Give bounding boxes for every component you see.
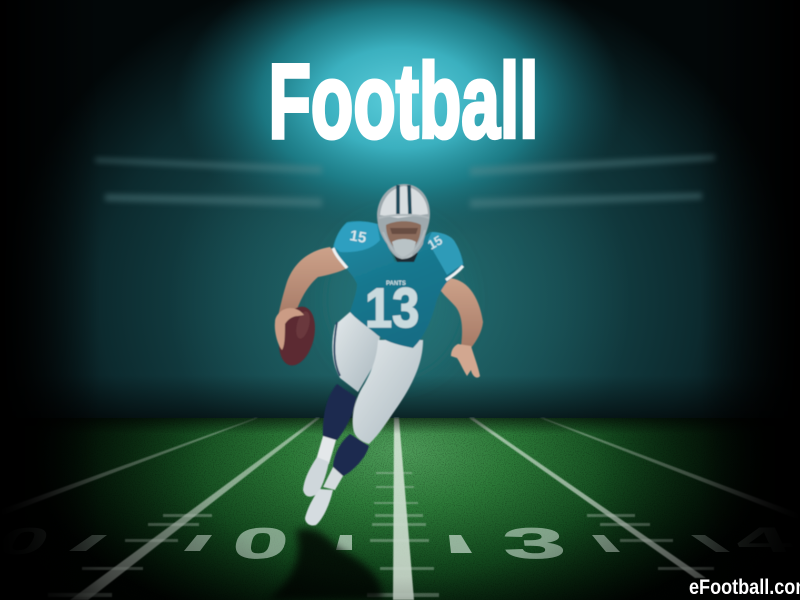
- yard numbers: 4: [725, 520, 800, 560]
- title: Football: [268, 42, 538, 160]
- helmet stripes: [398, 185, 410, 214]
- left arm: [278, 247, 347, 318]
- jersey: [333, 221, 464, 348]
- right shoe: [305, 489, 333, 526]
- football field: [0, 418, 800, 600]
- sleeve stripes: [333, 248, 463, 280]
- player: 15: [425, 232, 445, 253]
- hash marks: [48, 472, 714, 597]
- shoulder highlights: [334, 222, 380, 252]
- player: [273, 184, 483, 526]
- glow behind player: [325, 220, 465, 380]
- left calf: [323, 384, 356, 440]
- helmet: [377, 184, 430, 262]
- football: [273, 303, 321, 369]
- left shoe: [303, 457, 329, 497]
- right hand: [451, 344, 480, 378]
- yard numbers: 0: [228, 520, 293, 568]
- player shadow: [268, 529, 382, 600]
- right thigh: [353, 340, 423, 444]
- yard numbers: 3: [500, 519, 568, 567]
- face mask: [379, 215, 429, 258]
- pants stripe: [334, 322, 340, 376]
- right arm: [439, 278, 483, 348]
- horizon haze: [0, 418, 800, 434]
- left hand: [275, 308, 304, 350]
- right calf: [333, 434, 369, 476]
- right sock: [323, 467, 343, 490]
- face: [386, 221, 421, 250]
- sleeve numbers: 15: [348, 227, 368, 247]
- field vignette: [0, 418, 800, 600]
- yard numbers: [0, 519, 800, 568]
- chest logo: PANTS: [386, 281, 406, 287]
- field lines: [0, 418, 800, 600]
- jersey number: 13: [365, 277, 419, 340]
- yard dashes: [69, 535, 730, 553]
- left sock: [316, 436, 336, 464]
- stadium light bars: [95, 155, 715, 208]
- left thigh: [332, 312, 380, 392]
